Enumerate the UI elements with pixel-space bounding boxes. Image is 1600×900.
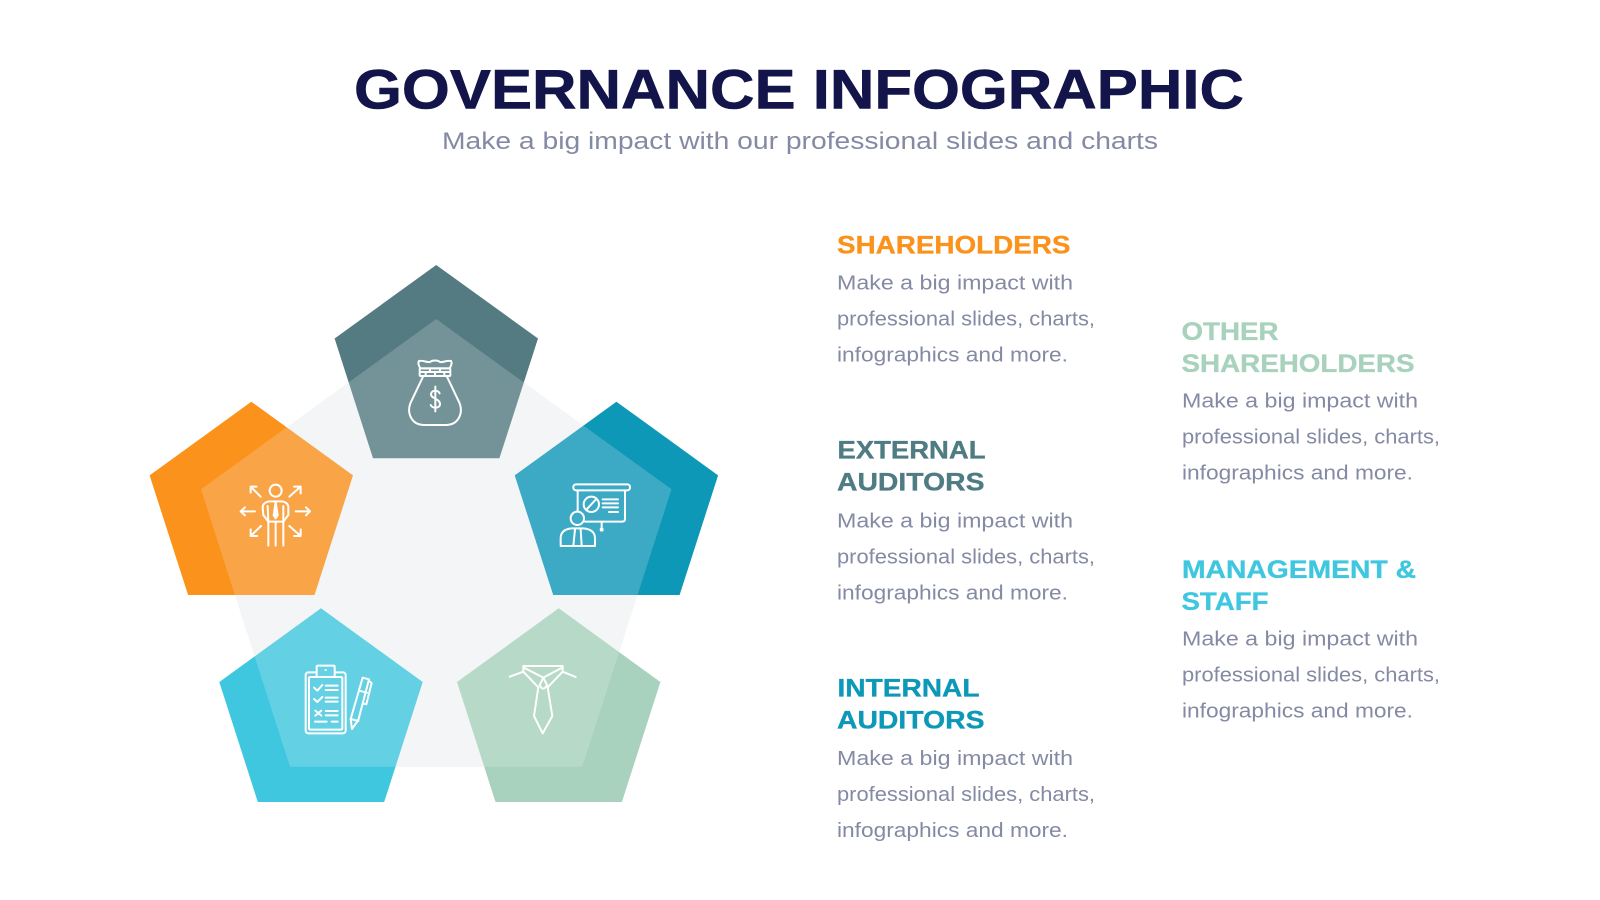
body: other shareholders <box>1182 391 1440 485</box>
body: other shareholders: infographics and more. <box>1182 463 1413 485</box>
heading: other shareholders: OTHER <box>1182 318 1278 346</box>
icon: clipboard and pen <box>306 666 372 733</box>
text block: other shareholders <box>1182 318 1440 485</box>
pentagon: management cyan <box>219 608 423 802</box>
pentagon: internal auditors blue <box>515 402 718 595</box>
body: management and staff: infographics and more. <box>1182 701 1413 723</box>
body: management and staff: professional slides, charts, <box>1182 665 1440 687</box>
icon: money bag <box>409 360 461 425</box>
body: internal auditors: professional slides, charts, <box>837 784 1095 806</box>
heading: management and staff: STAFF <box>1182 588 1268 616</box>
heading: internal auditors <box>837 675 984 735</box>
body: shareholders: professional slides, charts, <box>837 308 1095 330</box>
body: management and staff <box>1182 629 1440 723</box>
pentagon diagram <box>150 265 718 802</box>
body: other shareholders: Make a big impact with <box>1182 391 1418 413</box>
body: internal auditors <box>837 748 1095 842</box>
body: internal auditors: infographics and more. <box>837 820 1068 842</box>
text block: management and staff <box>1182 556 1440 723</box>
heading: management and staff: MANAGEMENT & <box>1182 556 1416 584</box>
heading: internal auditors: INTERNAL <box>838 675 980 703</box>
body: external auditors: infographics and more. <box>837 582 1068 604</box>
body: external auditors <box>837 510 1095 604</box>
body: shareholders: infographics and more. <box>837 344 1068 366</box>
text block: external auditors <box>837 437 1095 604</box>
title: GOVERNANCE INFOGRAPHIC <box>354 58 1244 120</box>
heading: shareholders: SHAREHOLDERS <box>837 231 1070 259</box>
icon: presenter with board <box>561 484 630 546</box>
heading: external auditors <box>837 437 986 497</box>
body: external auditors: Make a big impact with <box>837 510 1073 532</box>
pentagon: other shareholders green <box>457 608 660 802</box>
heading: external auditors: AUDITORS <box>837 469 984 497</box>
heading: other shareholders: SHAREHOLDERS <box>1182 350 1414 378</box>
body: shareholders: Make a big impact with <box>837 272 1073 294</box>
body: external auditors: professional slides, charts, <box>837 546 1095 568</box>
heading: external auditors: EXTERNAL <box>838 437 986 465</box>
text block: internal auditors <box>837 675 1095 842</box>
pentagon: external auditors teal <box>335 265 538 458</box>
central background pentagon <box>201 319 672 767</box>
icon: necktie <box>510 666 576 733</box>
overlap highlight <box>201 319 672 767</box>
body: other shareholders: professional slides, charts, <box>1182 427 1440 449</box>
heading: management and staff <box>1182 556 1416 616</box>
pentagon: shareholders orange <box>150 402 353 595</box>
text block: shareholders <box>837 231 1095 366</box>
heading: internal auditors: AUDITORS <box>837 707 984 735</box>
subtitle: Make a big impact with our professional slides and charts <box>442 128 1158 155</box>
body: management and staff: Make a big impact with <box>1182 629 1418 651</box>
body: internal auditors: Make a big impact with <box>837 748 1073 770</box>
icon: person with arrows <box>241 485 310 546</box>
heading: other shareholders <box>1182 318 1414 378</box>
body: shareholders <box>837 272 1095 366</box>
